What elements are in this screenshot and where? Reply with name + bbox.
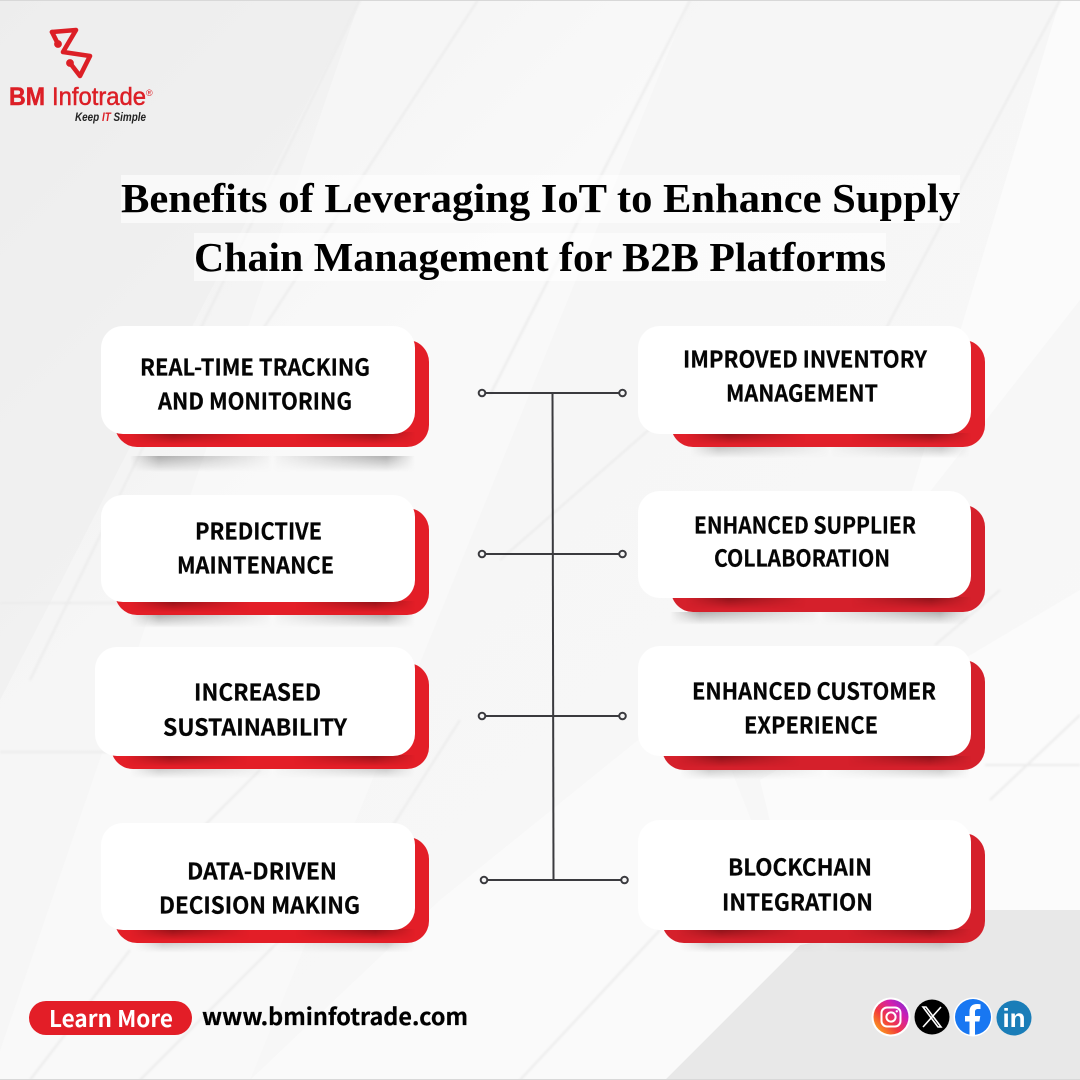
learn more button: Learn More xyxy=(49,1000,173,1034)
icon: linkedin: in xyxy=(1002,1003,1026,1033)
title: Benefits of Leveraging IoT to Enhance Supply xyxy=(121,175,961,221)
logo wordmark: BM xyxy=(9,83,45,111)
icon: facebook xyxy=(954,998,992,1036)
title xyxy=(121,175,961,281)
logo: BM Infotrade: Infotrade xyxy=(52,83,146,111)
icon: linkedin xyxy=(996,1000,1032,1036)
icon: instagram xyxy=(872,998,910,1036)
logo tagline: Keep IT Simple xyxy=(75,112,147,124)
card: Predictive Maintenance: PREDICTIVE xyxy=(195,512,322,546)
card: Blockchain Integration: INTEGRATION xyxy=(722,884,873,918)
card: Real-Time Tracking and Monitoring: AND MONITORING xyxy=(157,382,352,416)
card: Real-Time Tracking and Monitoring: REAL-TIME TRACKING xyxy=(140,348,370,382)
logo: BM Infotrade: ® xyxy=(146,88,153,98)
card: Increased Sustainability xyxy=(95,647,429,781)
card: Enhanced Supplier Collaboration: COLLABORATION xyxy=(714,540,890,574)
card: Predictive Maintenance xyxy=(101,495,429,631)
card: Data-Driven Decision Making: DECISION MAKING xyxy=(159,886,360,920)
card: Data-Driven Decision Making: DATA-DRIVEN xyxy=(187,852,337,886)
card: Real-Time Tracking and Monitoring xyxy=(101,326,429,476)
card: Enhanced Supplier Collaboration xyxy=(638,491,985,628)
connector diagram xyxy=(479,390,628,883)
social icons xyxy=(872,998,1032,1036)
card: Increased Sustainability: INCREASED xyxy=(194,674,321,708)
card: Improved Inventory Management: IMPROVED INVENTORY xyxy=(683,340,928,374)
card: Improved Inventory Management xyxy=(638,326,985,461)
card: Predictive Maintenance: MAINTENANCE xyxy=(177,546,334,580)
card: Enhanced Customer Experience xyxy=(638,646,985,782)
card: Enhanced Customer Experience: ENHANCED CUSTOMER xyxy=(692,672,936,706)
card: Enhanced Customer Experience: EXPERIENCE xyxy=(744,706,878,740)
card: Data-Driven Decision Making xyxy=(101,823,429,955)
title: Chain Management for B2B Platforms xyxy=(194,234,886,280)
card: Blockchain Integration xyxy=(659,834,985,951)
card: Blockchain Integration: BLOCKCHAIN xyxy=(728,848,872,882)
website url: www.bminfotrade.com xyxy=(202,998,468,1032)
card: Enhanced Supplier Collaboration: ENHANCED SUPPLIER xyxy=(694,506,916,540)
logo: BM Infotrade xyxy=(9,30,153,124)
icon: X xyxy=(914,1000,950,1034)
icon: logo mark xyxy=(52,30,90,76)
card: Increased Sustainability: SUSTAINABILITY xyxy=(163,708,348,742)
card: Improved Inventory Management: MANAGEMENT xyxy=(726,374,878,408)
